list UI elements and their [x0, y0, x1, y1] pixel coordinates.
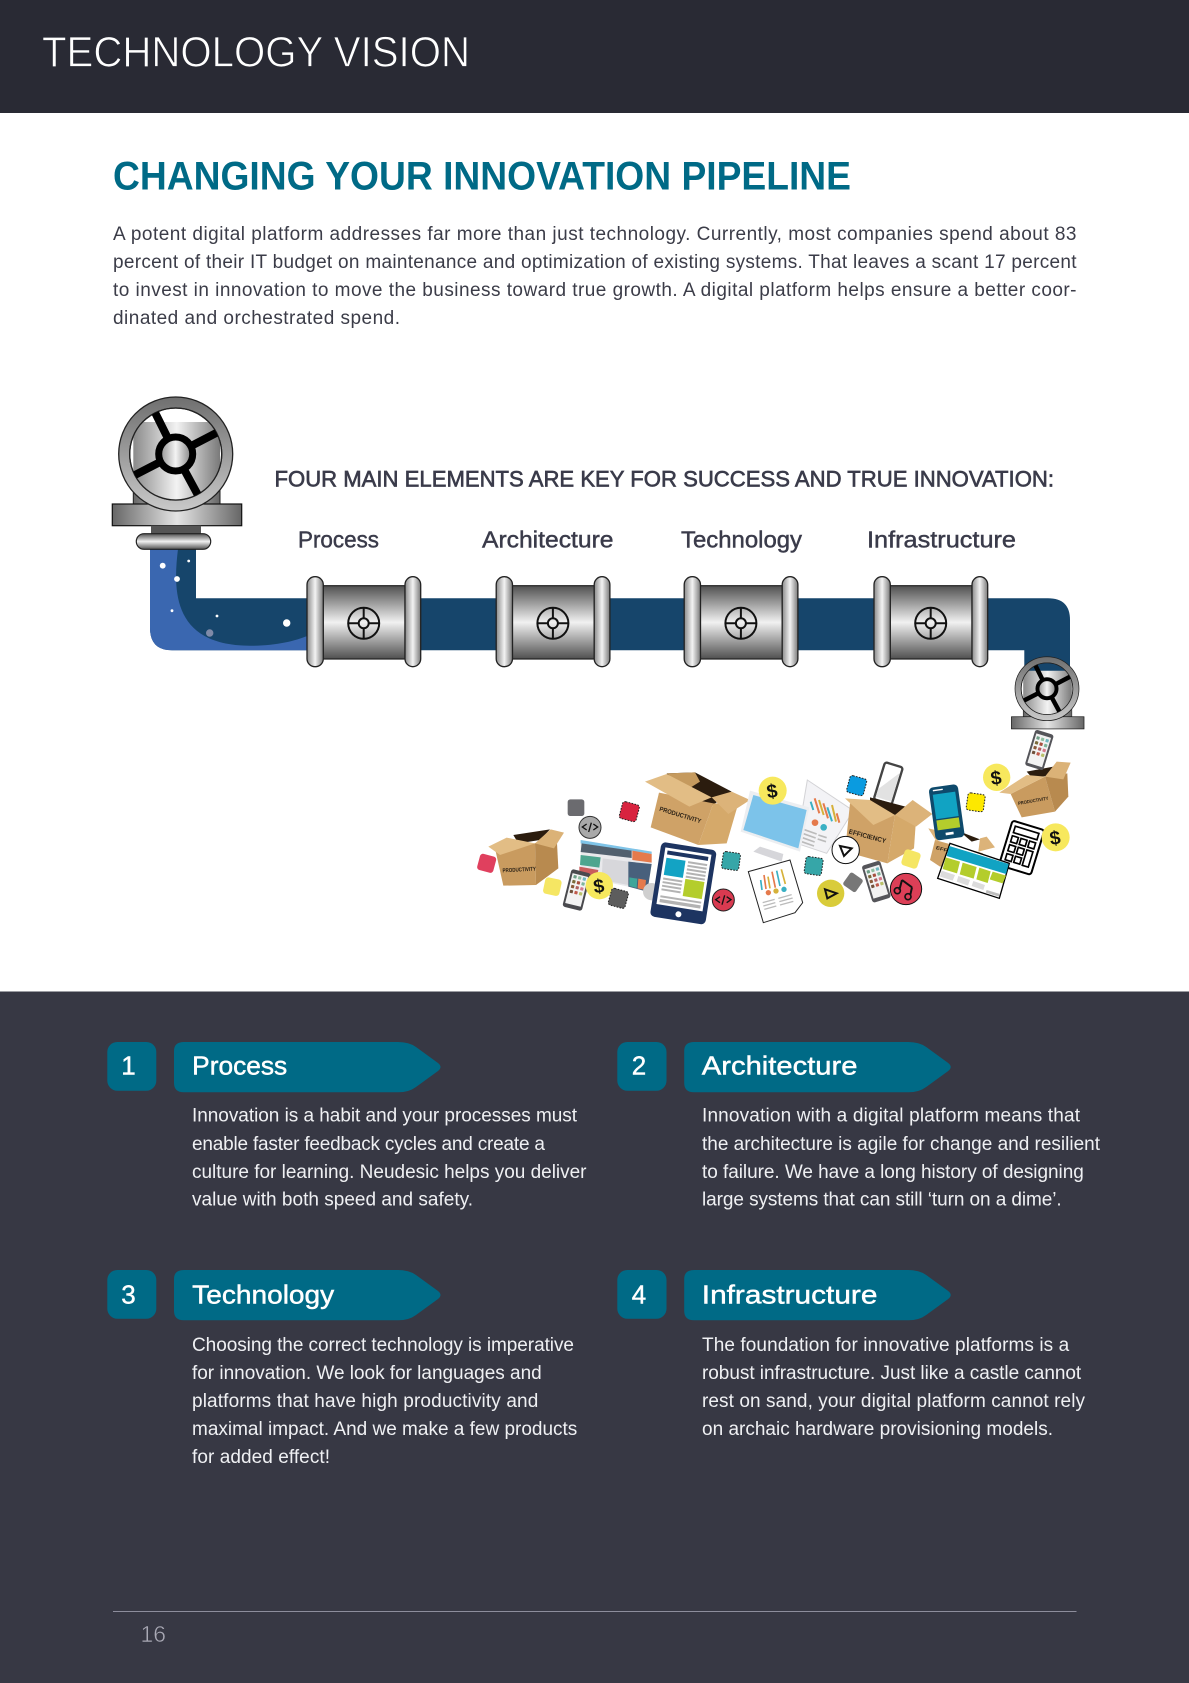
valve 4	[874, 577, 988, 667]
navy phone	[928, 784, 965, 841]
valve label: Technology: Technology	[681, 527, 803, 553]
pipeline diagram	[112, 397, 1084, 729]
illustration: scattered products, right half	[741, 729, 1071, 923]
number badge 4	[617, 1270, 666, 1319]
gray diamond	[842, 872, 864, 893]
valve 1	[307, 577, 421, 667]
teal dashed square	[804, 856, 823, 876]
description 3: Choosing the correct technology is imperative	[192, 1335, 574, 1356]
pipe: dark main run with curved corners	[150, 549, 1070, 670]
red square	[476, 853, 497, 874]
dollar coin on monitor	[759, 777, 787, 805]
description 3: platforms that have high productivity and	[192, 1391, 538, 1412]
number badge 2	[617, 1042, 666, 1091]
yellow square	[542, 877, 562, 897]
dollar coin: $	[592, 876, 606, 898]
pale circle	[643, 883, 660, 900]
dollar coin	[586, 872, 613, 899]
description 3: for added effect!	[192, 1447, 330, 1468]
title arrow: Infrastructure	[684, 1270, 951, 1320]
browser window	[579, 840, 652, 892]
small pump wheel	[1011, 657, 1084, 729]
number badge 1	[107, 1042, 156, 1091]
page number: 16	[140, 1621, 166, 1647]
intro paragraph: percent of their IT budget on maintenance and optimization of existing systems. That leaves a scant 17 percent	[113, 252, 1077, 273]
header bar	[0, 0, 1189, 113]
valve label: Architecture: Architecture	[482, 527, 614, 553]
valve 2	[496, 577, 610, 667]
valve 3	[684, 577, 798, 667]
valve label: Process: Process	[298, 527, 379, 553]
description 1: enable faster feedback cycles and create a	[192, 1134, 545, 1155]
number badge 3: 3	[121, 1279, 136, 1309]
teal dashed square	[721, 851, 741, 871]
phone	[861, 860, 891, 903]
description 2: large systems that can still ‘turn on a dime’.	[702, 1190, 1062, 1211]
number badge 2: 2	[632, 1050, 646, 1080]
title arrow: Architecture	[684, 1042, 951, 1092]
item 4: Infrastructure	[617, 1270, 1086, 1440]
box: efficiency behind	[928, 828, 995, 867]
large pump wheel	[112, 397, 242, 549]
title arrow: Process	[174, 1042, 440, 1092]
box: productivity right: PRODUCTIVITY	[1018, 796, 1049, 806]
code badge gray	[579, 816, 601, 838]
description 1: value with both speed and safety.	[192, 1190, 473, 1211]
description 2: to failure. We have a long history of designing	[702, 1162, 1084, 1183]
title arrow: Architecture: Architecture	[702, 1050, 858, 1080]
gray dashed square	[608, 888, 629, 909]
intro paragraph: A potent digital platform addresses far more than just technology. Currently, most companies spend about 83	[113, 224, 1076, 245]
red dashed square	[619, 801, 640, 822]
item 1: Process	[107, 1042, 587, 1211]
pipe: light blue water sweep	[150, 549, 307, 650]
phone above box	[1025, 729, 1054, 771]
yellow square	[900, 848, 921, 869]
dark lower panel	[0, 992, 1189, 1683]
box: productivity left	[488, 829, 564, 886]
diagram heading: FOUR MAIN ELEMENTS ARE KEY FOR SUCCESS AND TRUE INNOVATION:	[274, 467, 1054, 492]
description 1	[192, 1106, 587, 1211]
calculator	[999, 820, 1044, 875]
item 3: Technology	[107, 1270, 577, 1468]
description 4: on archaic hardware provisioning models.	[702, 1419, 1053, 1440]
header title: TECHNOLOGY VISION	[42, 30, 470, 77]
title arrow: Technology	[174, 1270, 440, 1320]
valve label: Infrastructure: Infrastructure	[867, 527, 1016, 553]
blue dashed square	[846, 775, 867, 796]
play badge yellow	[817, 880, 844, 907]
title arrow: Process: Process	[192, 1050, 287, 1080]
phone	[562, 869, 591, 911]
intro paragraph: dinated and orchestrated spend.	[113, 308, 400, 329]
dollar coin on monitor: $	[765, 781, 779, 803]
box: efficiency behind: EFFI	[935, 845, 950, 853]
dollar coin: $	[1048, 828, 1062, 850]
title arrow: Infrastructure: Infrastructure	[702, 1279, 877, 1309]
big box: productivity	[645, 772, 750, 845]
number badge 4: 4	[632, 1279, 646, 1309]
music badge red	[890, 873, 922, 905]
description 2	[702, 1106, 1101, 1211]
illustration: scattered products, left half	[476, 772, 750, 925]
description 1: culture for learning. Neudesic helps you deliver	[192, 1162, 587, 1183]
box: efficiency	[845, 797, 932, 863]
play badge white	[832, 836, 859, 864]
tablet	[650, 842, 717, 925]
landscape tablet	[938, 843, 1009, 898]
description 3: for innovation. We look for languages and	[192, 1363, 542, 1384]
item 2: Architecture	[617, 1042, 1101, 1211]
description 3: maximal impact. And we make a few products	[192, 1419, 577, 1440]
monitor	[741, 791, 809, 862]
box: efficiency: EFFICIENCY	[848, 829, 887, 845]
number badge 3	[107, 1270, 156, 1319]
description 4: The foundation for innovative platforms is a	[702, 1335, 1070, 1356]
intro paragraph	[113, 224, 1077, 329]
description 3	[192, 1335, 577, 1468]
dollar coin	[983, 764, 1010, 791]
title arrow: Technology: Technology	[192, 1279, 334, 1309]
description 4	[702, 1335, 1086, 1440]
box: productivity left: PRODUCTIVITY	[502, 867, 536, 874]
description 2: the architecture is agile for change and resilient	[702, 1134, 1101, 1155]
poster chart	[797, 780, 853, 853]
main heading: CHANGING YOUR INNOVATION PIPELINE	[113, 154, 851, 198]
intro paragraph: to invest in innovation to move the business toward true growth. A digital platform helps ensure a better coor-	[113, 280, 1076, 301]
dollar coin	[1042, 823, 1070, 851]
big box: productivity: PRODUCTIVITY	[658, 806, 703, 825]
number badge 1: 1	[121, 1050, 136, 1080]
code badge red	[712, 889, 734, 911]
water bubbles	[160, 560, 290, 637]
description 4: robust infrastructure. Just like a castle cannot	[702, 1363, 1082, 1384]
description 1: Innovation is a habit and your processes must	[192, 1106, 578, 1127]
yellow dashed square	[966, 793, 985, 812]
dollar coin: $	[989, 768, 1003, 790]
description 4: rest on sand, your digital platform cannot rely	[702, 1391, 1086, 1412]
gray square	[568, 799, 584, 816]
document page	[748, 860, 803, 923]
box: productivity right	[999, 762, 1071, 817]
white phone in box	[874, 762, 903, 805]
description 2: Innovation with a digital platform means that	[702, 1106, 1081, 1127]
